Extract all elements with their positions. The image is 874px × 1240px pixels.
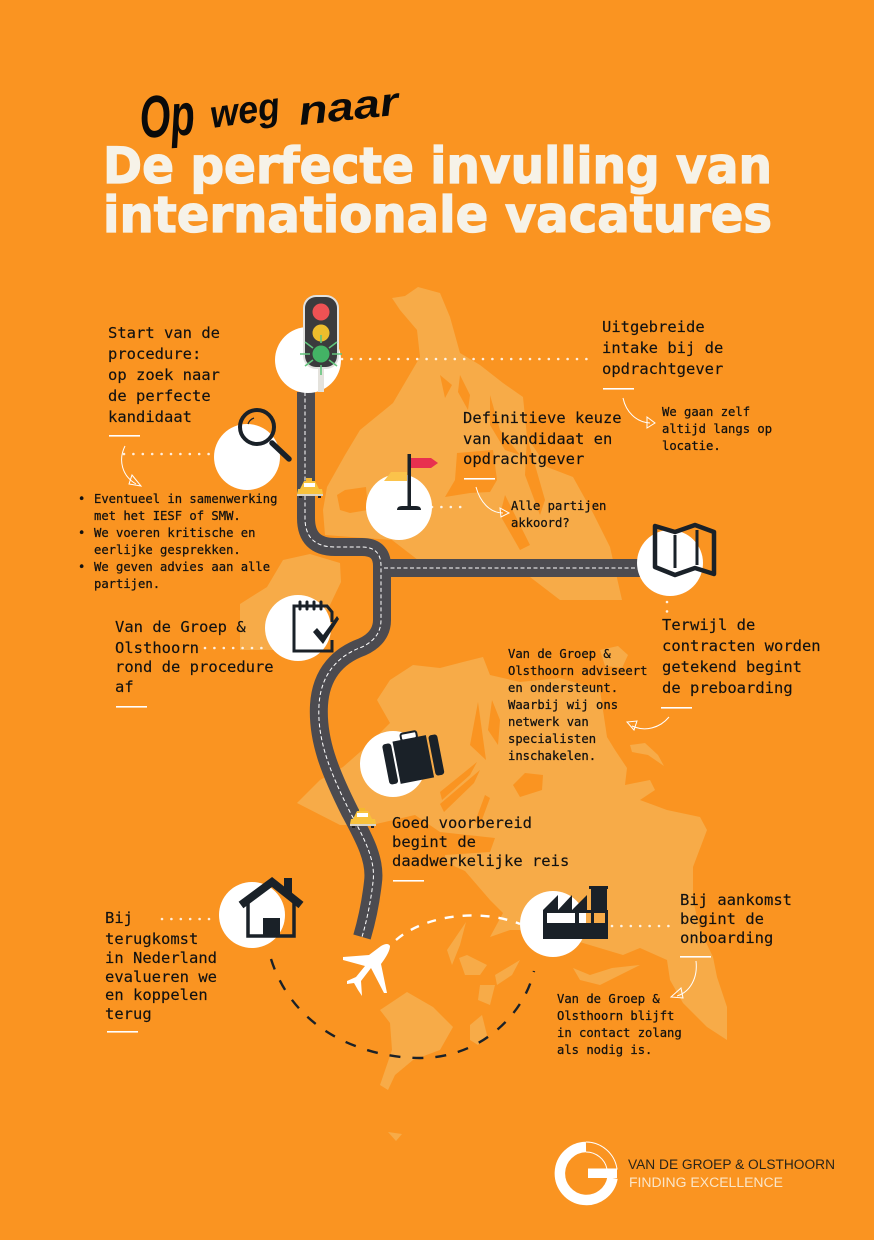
- note: netwerk van specialisten: specialisten: [508, 732, 596, 746]
- note: op locatie: [662, 405, 772, 453]
- note: netwerk van specialisten: netwerk van: [508, 715, 589, 729]
- note: netwerk van specialisten: en ondersteunt.: [508, 681, 618, 695]
- note: in contact: als nodig is.: [557, 1043, 652, 1057]
- note: akkoord: Alle partijen: [511, 499, 606, 513]
- note: in contact: Olsthoorn blijft: [557, 1009, 674, 1023]
- note: in contact: Van de Groep &: [557, 992, 660, 1006]
- text: start van de procedure: procedure:: [108, 345, 201, 363]
- script heading: naar: [296, 80, 403, 134]
- text: terugkomst: evalueren we: [105, 968, 217, 986]
- curved arrows: [122, 398, 696, 998]
- road: [305, 392, 642, 937]
- bullet list: met het IESF of SMW.: [94, 509, 241, 523]
- bullet list: We voeren kritische en: [94, 526, 255, 540]
- text: definitieve keuze: van kandidaat en: [463, 430, 612, 448]
- text: preboarding: Terwijl de: [662, 616, 755, 634]
- text: goed voorbereid: daadwerkelijke reis: [392, 852, 569, 870]
- note: op locatie: locatie.: [662, 439, 721, 453]
- title: [103, 80, 772, 244]
- text: start van de procedure: de perfecte: [108, 387, 211, 405]
- step: house icon: [219, 878, 301, 948]
- logo: [560, 1142, 835, 1200]
- text: start van de procedure: kandidaat: [108, 408, 192, 426]
- step: factory icon: [520, 886, 608, 957]
- note: akkoord: akkoord?: [511, 516, 570, 530]
- step: magnifier icon: [214, 410, 289, 490]
- text: terugkomst: terugkomst: [105, 930, 198, 948]
- note: netwerk van specialisten: Olsthoorn adviseert: [508, 664, 647, 678]
- text: uitgebreide intake: opdrachtgever: [602, 360, 723, 378]
- text: start van de procedure: op zoek naar: [108, 366, 220, 384]
- text: preboarding: contracten worden: [662, 637, 821, 655]
- text: goed voorbereid: [392, 814, 569, 882]
- logo text: FINDING EXCELLENCE: [629, 1175, 783, 1190]
- step: traffic light: [275, 295, 342, 393]
- taxi: [350, 808, 376, 828]
- airplane: [343, 944, 390, 996]
- bullet list: •: [78, 560, 85, 574]
- text: onboarding: Bij aankomst: [680, 891, 792, 909]
- text: preboarding: [661, 616, 821, 709]
- text: start van de procedure: [108, 324, 220, 437]
- text: onboarding: [680, 891, 792, 958]
- note: akkoord: [511, 499, 606, 530]
- text: procedure afronden: [115, 618, 274, 708]
- text: uitgebreide intake: Uitgebreide: [602, 318, 705, 336]
- step: flag icon: [366, 454, 438, 540]
- bullet list: [78, 492, 277, 591]
- main heading: [103, 137, 772, 244]
- logo text: [628, 1157, 835, 1190]
- bullet list: •: [78, 492, 85, 506]
- logo mark: [560, 1142, 617, 1200]
- step: map icon: [637, 525, 714, 596]
- text: terugkomst: Bij: [105, 909, 133, 927]
- text: uitgebreide intake: [602, 318, 723, 390]
- logo text: VAN DE GROEP & OLSTHOORN: [628, 1157, 835, 1172]
- text: onboarding: begint de: [680, 910, 764, 928]
- text: preboarding: de preboarding: [662, 679, 793, 697]
- bullet list: We geven advies aan alle: [94, 560, 270, 574]
- text: procedure afronden: af: [115, 678, 134, 696]
- text: onboarding: onboarding: [680, 929, 773, 947]
- bullet list: Eventueel in samenwerking: [94, 492, 277, 506]
- note: op locatie: We gaan zelf: [662, 405, 750, 419]
- text: procedure afronden: Olsthoorn: [115, 639, 199, 657]
- text: goed voorbereid: begint de: [392, 833, 476, 851]
- script heading: Op: [137, 80, 197, 151]
- text: definitieve keuze: Definitieve keuze: [463, 409, 622, 427]
- text: terugkomst: en koppelen: [105, 986, 208, 1004]
- bullet list: eerlijke gesprekken.: [94, 543, 241, 557]
- script heading: [137, 80, 403, 151]
- note: netwerk van specialisten: Waarbij wij ons: [508, 698, 618, 712]
- text: procedure afronden: Van de Groep &: [115, 618, 246, 636]
- text: terugkomst: in Nederland: [105, 949, 217, 967]
- note: netwerk van specialisten: [508, 647, 647, 763]
- text: definitieve keuze: opdrachtgever: [463, 450, 584, 468]
- bullet list: partijen.: [94, 577, 160, 591]
- text: start van de procedure: Start van de: [108, 324, 220, 342]
- background map: [240, 287, 727, 1141]
- route arcs: [271, 915, 534, 1058]
- main heading: internationale vacatures: [103, 186, 772, 244]
- main heading: De perfecte invulling van: [103, 137, 772, 195]
- text: goed voorbereid: Goed voorbereid: [392, 814, 532, 832]
- text: terugkomst: terug: [105, 1005, 152, 1023]
- note: netwerk van specialisten: inschakelen.: [508, 749, 596, 763]
- note: netwerk van specialisten: Van de Groep &: [508, 647, 611, 661]
- text: preboarding: getekend begint: [662, 658, 802, 676]
- step: checklist icon: [265, 595, 339, 661]
- text: terugkomst: [105, 909, 217, 1033]
- text: definitieve keuze: [463, 409, 622, 480]
- text: procedure afronden: rond de procedure: [115, 658, 274, 676]
- note: in contact: [557, 992, 682, 1057]
- note: in contact: in contact zolang: [557, 1026, 682, 1040]
- dotted connectors: [124, 359, 672, 926]
- text: uitgebreide intake: intake bij de: [602, 339, 723, 357]
- note: op locatie: altijd langs op: [662, 422, 772, 436]
- taxi: [297, 478, 323, 498]
- bullet list: •: [78, 526, 85, 540]
- map inlets: [337, 375, 545, 825]
- step: suitcase icon: [360, 727, 445, 797]
- script heading: weg: [207, 84, 282, 136]
